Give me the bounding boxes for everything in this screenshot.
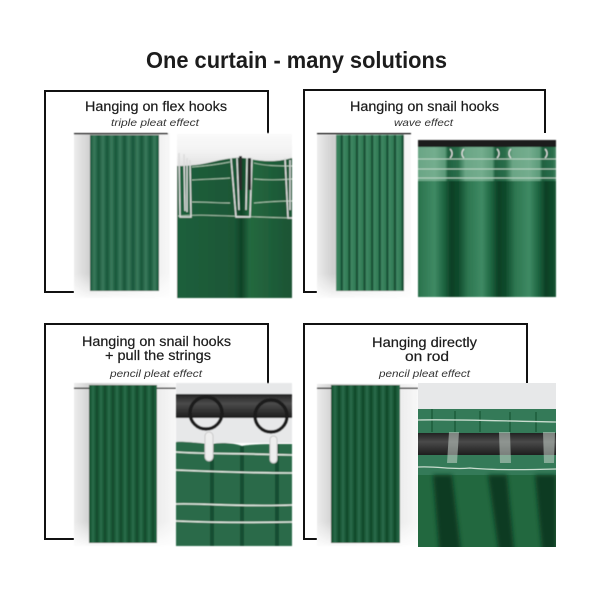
panel: flex hooks bbox=[45, 91, 292, 298]
heading: Hanging on snail hooks bbox=[350, 99, 499, 114]
frame bbox=[45, 91, 268, 292]
panel: directly on rod bbox=[304, 324, 556, 560]
photo: curtain full view bbox=[317, 384, 418, 546]
photo: rod pocket detail bbox=[418, 383, 556, 560]
subtitle: wave effect bbox=[394, 117, 454, 129]
frame bbox=[304, 324, 527, 539]
photo: rings on rod detail bbox=[176, 383, 292, 546]
subtitle: pencil pleat effect bbox=[109, 368, 203, 380]
heading: Hanging on snail hooks bbox=[82, 334, 231, 349]
frame bbox=[304, 90, 545, 292]
photo: snail hook wave detail bbox=[418, 140, 556, 297]
title: One curtain - many solutions bbox=[146, 47, 447, 73]
frame bbox=[45, 324, 268, 539]
photo: curtain full view bbox=[74, 133, 170, 298]
second heading line: + pull the strings bbox=[105, 348, 211, 363]
heading: Hanging on flex hooks bbox=[85, 99, 227, 114]
photo: flex hook detail bbox=[170, 133, 292, 298]
heading: Hanging directly bbox=[372, 335, 477, 350]
photo: curtain full view bbox=[317, 133, 411, 298]
photo: curtain full view bbox=[74, 383, 176, 546]
panel: snail hooks wave bbox=[304, 90, 556, 298]
panel: snail hooks pull strings bbox=[45, 324, 292, 546]
subtitle: pencil pleat effect bbox=[378, 368, 471, 380]
second heading line: on rod bbox=[405, 349, 449, 364]
subtitle: triple pleat effect bbox=[111, 117, 200, 129]
